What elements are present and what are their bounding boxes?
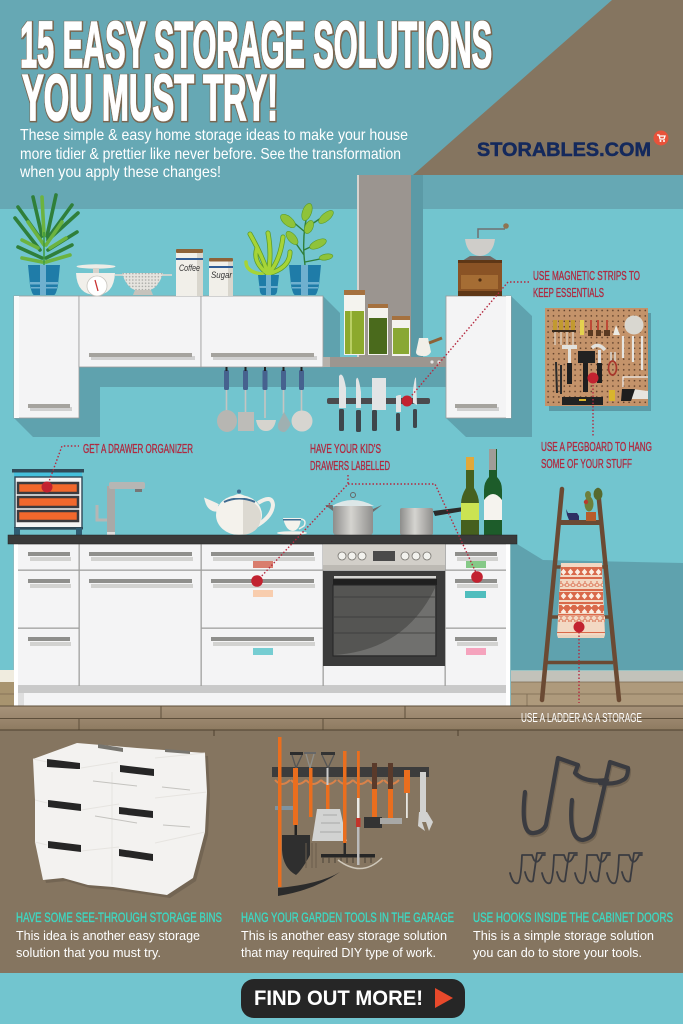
tip: storage bins: HAVE SOME SEE-THROUGH STORAGE BINS <box>16 909 222 925</box>
logo: storables.com <box>477 130 668 161</box>
image: cabinet door hooks <box>510 758 642 883</box>
callout: drawers labelled: HAVE YOUR KID'S <box>310 441 381 456</box>
callout: pegboard <box>541 372 652 471</box>
plant middle <box>246 233 290 295</box>
title: YOU MUST TRY! <box>22 61 278 134</box>
callout: drawers labelled: DRAWERS LABELLED <box>310 458 390 473</box>
tip: garden tools: HANG YOUR GARDEN TOOLS IN THE GARAGE <box>241 909 454 925</box>
wine bottles <box>461 449 502 535</box>
callout: magnetic strips <box>402 268 640 406</box>
front floor boards <box>0 706 683 730</box>
subtitle: more tidier & prettier like never before. See the transformation <box>20 146 401 163</box>
cabinet wall shadows <box>14 296 683 670</box>
plant left <box>15 195 78 295</box>
hood shelf <box>323 357 446 367</box>
ladder shelf <box>542 488 619 700</box>
brown roof triangle <box>413 0 683 175</box>
logo: storables.com: STORABLES.COM <box>477 140 651 161</box>
teapot <box>207 490 273 535</box>
magnetic knife strip <box>327 374 430 432</box>
bottom teal strip <box>0 973 683 1024</box>
colander <box>115 273 172 295</box>
coffee pot cezve <box>416 338 442 356</box>
base cabinets <box>14 544 510 706</box>
tip: garden tools: This is another easy storage solution <box>241 928 447 943</box>
coffee grinder <box>458 223 509 296</box>
tip: hooks: This is a simple storage solution <box>473 928 654 943</box>
tip: storage bins: solution that you must try. <box>16 945 161 960</box>
image: garden tools rack <box>272 737 433 896</box>
callout: drawer organizer <box>42 441 193 492</box>
tip: garden tools <box>241 909 454 960</box>
range hood <box>357 175 423 357</box>
upper right cabinet <box>446 296 511 418</box>
plant right <box>278 202 335 295</box>
tip: hooks: you can do to store your tools. <box>473 945 642 960</box>
saucepan <box>400 507 464 535</box>
jar: coffee: Coffee <box>179 263 200 273</box>
towel on ladder <box>557 563 605 638</box>
hanging utensils <box>217 367 312 432</box>
image: storage bins <box>33 743 210 898</box>
drawer organizer <box>12 469 84 535</box>
storage jars on shelf <box>344 290 410 356</box>
subtitle <box>19 127 408 181</box>
cooking pot <box>325 492 382 535</box>
kitchen scale <box>76 264 116 296</box>
callout: drawer organizer: GET A DRAWER ORGANIZER <box>83 441 193 456</box>
callout: ladder <box>521 622 642 725</box>
find out more button: FIND OUT MORE! <box>254 987 423 1010</box>
jar: coffee <box>176 249 203 296</box>
drawer labels <box>253 561 486 655</box>
find out more button <box>241 979 465 1018</box>
tip: storage bins <box>16 909 222 960</box>
subtitle: when you apply these changes! <box>19 164 221 181</box>
jar: sugar <box>209 258 233 296</box>
tip: garden tools: that may required DIY type of work. <box>241 945 436 960</box>
oven <box>323 571 445 666</box>
tip: hooks <box>473 909 673 960</box>
upper wall shadow band <box>0 0 683 209</box>
oven control panel <box>323 544 445 570</box>
pegboard <box>545 308 651 411</box>
callout: magnetic strips: KEEP ESSENTIALS <box>533 285 604 300</box>
teacup and saucer <box>277 518 307 535</box>
brown tips panel <box>0 730 683 973</box>
countertop <box>8 535 517 544</box>
callout: pegboard: SOME OF YOUR STUFF <box>541 456 632 471</box>
upper left cabinets <box>14 296 323 418</box>
jar: sugar: Sugar <box>211 270 233 280</box>
subtitle: These simple & easy home storage ideas to make your house <box>20 127 408 144</box>
baseboard and back floor <box>0 670 683 706</box>
callout: drawers labelled <box>251 441 483 587</box>
title <box>20 8 492 134</box>
faucet <box>97 482 145 535</box>
tip: storage bins: This idea is another easy storage <box>16 928 200 943</box>
